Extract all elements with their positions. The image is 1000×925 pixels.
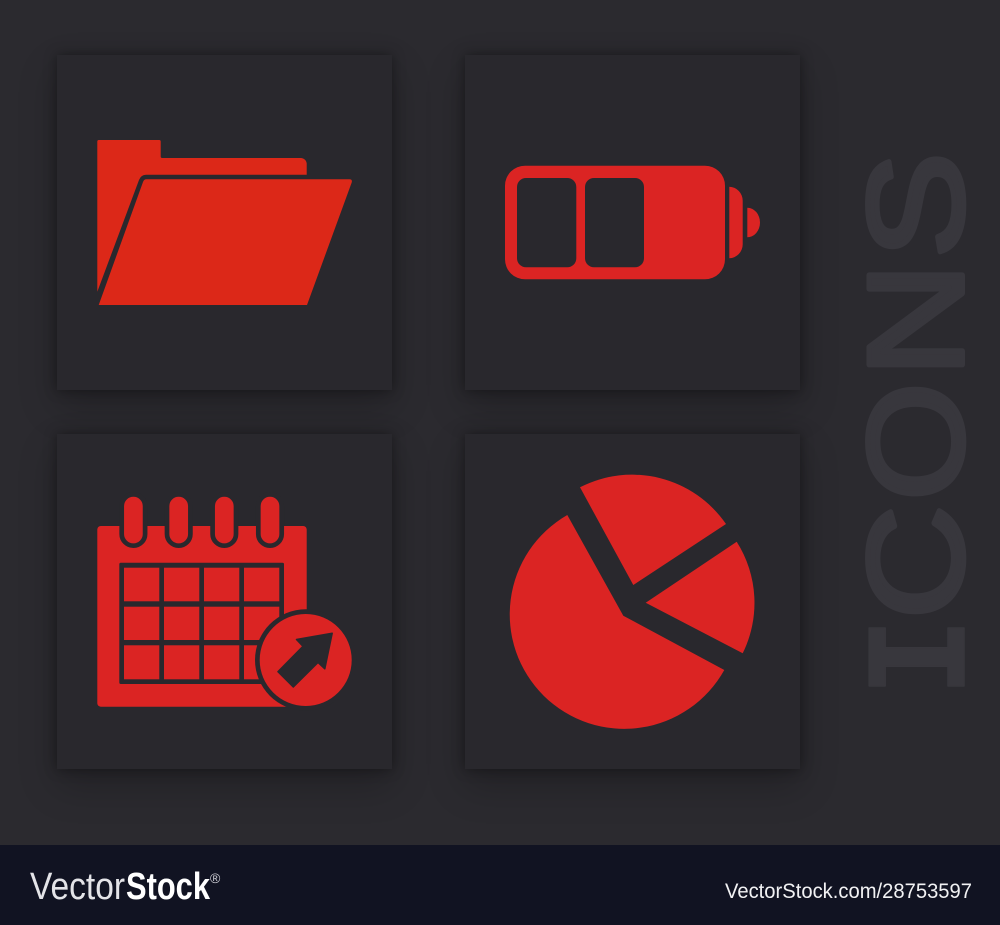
icon: calendar with arrow bbox=[97, 496, 352, 707]
letter O: O bbox=[840, 382, 992, 501]
panel: calendar bbox=[57, 434, 392, 769]
folder front bbox=[99, 179, 352, 305]
footer text bbox=[30, 866, 972, 908]
date grid bbox=[119, 563, 284, 684]
letter C: C bbox=[840, 505, 992, 619]
logo: VectorStock: Stock bbox=[126, 866, 211, 908]
footer bar bbox=[0, 845, 1000, 925]
logo: VectorStock: ® bbox=[210, 870, 221, 886]
panel: pie chart bbox=[465, 434, 800, 769]
vertical word: ICONS bbox=[840, 152, 1000, 696]
folder back bbox=[97, 140, 307, 292]
letter N: N bbox=[840, 262, 992, 378]
calendar page bbox=[97, 526, 307, 707]
icon: battery bbox=[505, 166, 760, 280]
panel: low battery bbox=[465, 55, 800, 390]
large slice bbox=[510, 515, 724, 729]
letter S: S bbox=[840, 152, 992, 259]
logo: VectorStock: Vector bbox=[30, 866, 125, 908]
battery body with two empty cells bbox=[505, 166, 725, 279]
panel: open folder bbox=[57, 55, 392, 390]
battery terminal, inner bbox=[729, 187, 743, 258]
right slice bbox=[646, 542, 754, 653]
icon: open folder bbox=[97, 140, 352, 305]
battery terminal, outer bbox=[747, 208, 760, 237]
logo: VectorStock bbox=[30, 866, 221, 908]
ring binders bbox=[122, 494, 282, 546]
icon: pie chart bbox=[510, 474, 754, 729]
arrow badge bbox=[255, 609, 356, 711]
image id: VectorStock.com/28753597 bbox=[725, 879, 972, 903]
top slice bbox=[580, 475, 726, 585]
